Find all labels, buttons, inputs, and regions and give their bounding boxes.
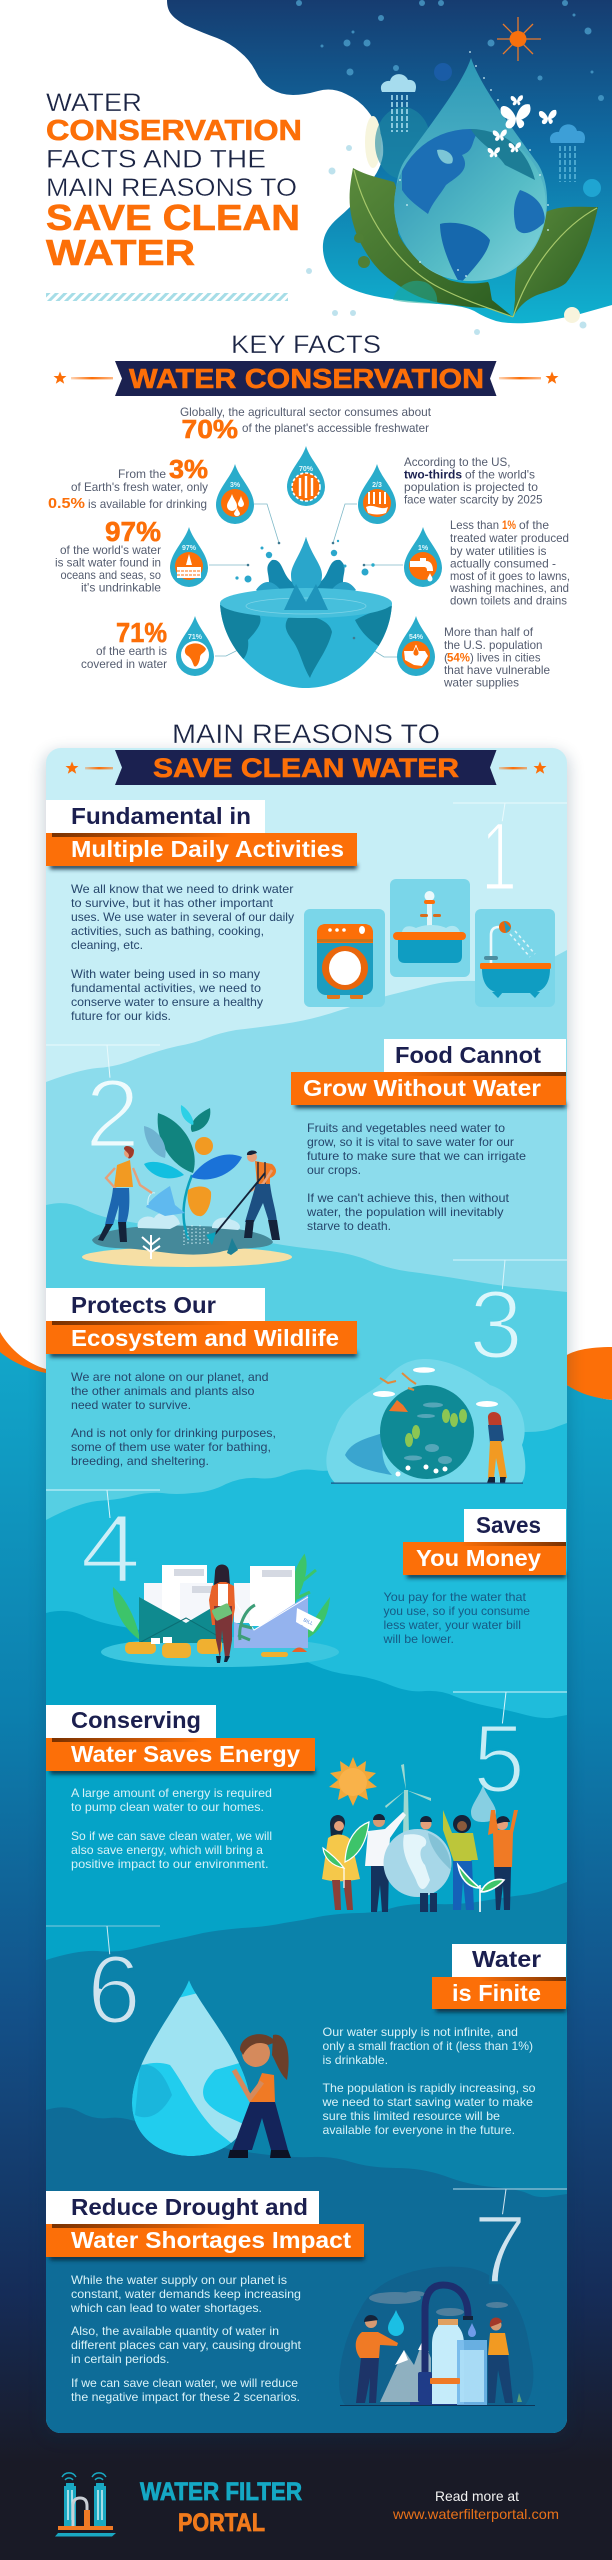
title: SAVE CLEAN <box>46 197 300 238</box>
reason 4 body: will be lower. <box>382 1632 454 1646</box>
bushes <box>138 1212 240 1230</box>
reason 6 body: we need to start saving water to make <box>321 2095 533 2109</box>
reason 1 body: uses. We use water in several of our daily <box>71 910 294 924</box>
title: FACTS AND THE <box>46 146 266 174</box>
reason 7 body: different places can vary, causing drought <box>71 2338 302 2352</box>
key fact: 1 percent consumed: washing machines, and <box>449 581 569 595</box>
icon: left rain cloud <box>381 74 416 132</box>
title: WATER <box>46 89 142 117</box>
reason 2 body: water, the population will inevitably <box>306 1205 504 1219</box>
banner: water conservation <box>54 361 558 396</box>
key fact: 54 percent cities: that have vulnerable <box>444 663 550 677</box>
number 4: 4 <box>80 1494 141 1603</box>
footer read more: www.waterfilterportal.com <box>392 2506 559 2522</box>
reason 2 body: grow, so it is vital to save water for our <box>307 1135 514 1149</box>
left leaf <box>350 168 513 317</box>
decorative blob behind ecosystem illustration <box>326 1359 525 1483</box>
key fact: 70 percent agriculture: 70% <box>182 414 238 444</box>
icon: right rain cloud <box>550 124 585 182</box>
man <box>206 1151 280 1245</box>
wind turbine <box>385 1764 431 1835</box>
connector lines <box>209 504 403 657</box>
reason 1 body: We all know that we need to drink water <box>71 882 294 896</box>
globe bowl with water splash <box>220 537 395 688</box>
water drop icon: 54 percent USA: 54% <box>409 634 424 641</box>
small white plants <box>142 1235 160 1259</box>
heading: key facts: KEY FACTS <box>231 331 381 359</box>
illustration: girl hugging water drop <box>130 1980 291 2158</box>
water drop icon: 1 percent tap: 1% <box>418 545 429 552</box>
hero blue wave blob <box>167 0 612 323</box>
reason 5 body: also save energy, which will bring a <box>71 1843 263 1857</box>
water drop icon: 1 percent tap <box>404 527 442 587</box>
reason 6 body <box>321 2025 536 2137</box>
title <box>46 89 302 273</box>
key fact: two-thirds scarcity: population is projected to <box>404 480 538 494</box>
key fact: 3 percent fresh water: From the <box>118 467 166 481</box>
number 5: 5 <box>473 1704 525 1813</box>
footer wordmark <box>140 2478 302 2537</box>
reason 6 heading <box>432 1944 566 2012</box>
plant <box>458 1865 504 1912</box>
reason 1 body: to survive, but it has other important <box>71 896 274 910</box>
decorative blob behind tap illustration <box>339 2267 533 2405</box>
water drop icon: 54 percent USA <box>397 616 435 676</box>
reason 3 body: the other animals and plants also <box>71 1384 255 1398</box>
panel: reasons card with wave bands <box>46 748 567 2433</box>
banner: save clean water <box>66 750 546 785</box>
water drop icon: two thirds <box>358 464 396 524</box>
reason 1 body: activities, such as bathing, cooking, <box>71 924 264 938</box>
reason 5 heading: Water Saves Energy <box>71 1741 300 1767</box>
reason 1 body <box>71 882 294 1023</box>
island <box>82 1247 292 1267</box>
reason 1 heading: Multiple Daily Activities <box>71 836 344 862</box>
reason 1 body: future for our kids. <box>71 1009 171 1023</box>
key fact: 97 percent salt water: of the world's water <box>60 543 161 557</box>
reason 3 body: breeding, and sheltering. <box>71 1454 209 1468</box>
reason 3 heading <box>46 1288 357 1357</box>
reason 1 heading: Fundamental in <box>71 803 251 829</box>
illustration: ecosystem globe <box>331 1367 523 1484</box>
reason 1 body: conserve water to ensure a healthy <box>71 995 263 1009</box>
card shadow <box>44 752 569 2438</box>
key fact: 3 percent fresh water: is available for drinking <box>88 497 207 511</box>
key fact: 54 percent cities: ) lives in cities <box>470 650 540 664</box>
reason 6 body: available for everyone in the future. <box>322 2123 515 2137</box>
water drop icon: two thirds: 2/3 <box>372 482 382 489</box>
key fact: 70 percent agriculture <box>180 405 432 444</box>
illustration: tap, bottle and people <box>340 2285 535 2406</box>
key fact: 1 percent consumed: by water utilities is <box>450 544 546 558</box>
globe <box>384 1829 452 1897</box>
water drop icon: 3 percent: 3% <box>230 482 241 489</box>
reason 7 body: the negative impact for these 2 scenarios. <box>71 2390 300 2404</box>
key fact: 97 percent salt water <box>55 516 161 594</box>
bowl <box>220 603 392 688</box>
water drop icon: 70 percent <box>287 446 325 506</box>
right orange swoosh <box>560 1347 612 1400</box>
number 4 <box>46 1490 160 1603</box>
title: MAIN REASONS TO <box>46 174 297 202</box>
key fact: 1 percent consumed: actually consumed - <box>450 556 556 570</box>
reason 6 body: only a small fraction of it (less than 1%) <box>322 2039 533 2053</box>
key fact: 54 percent cities: the U.S. population <box>444 638 542 652</box>
key fact: two-thirds scarcity: face water scarcity by 2025 <box>404 492 543 506</box>
water drop icon: 70 percent: 70% <box>299 466 314 473</box>
reason 2 heading <box>291 1039 566 1108</box>
water drop and man in orange <box>471 1785 518 1910</box>
banner: water conservation: WATER CONSERVATION <box>129 363 484 394</box>
man behind globe <box>420 1816 432 1830</box>
key fact: two-thirds scarcity: According to the US, <box>404 455 510 469</box>
number 3: 3 <box>469 1270 523 1379</box>
teal disc at leaf base <box>393 281 437 304</box>
key fact: 54 percent cities: water supplies <box>443 676 519 690</box>
key fact: 54 percent cities: 54% <box>447 650 470 664</box>
reason 4 heading: Saves <box>476 1512 541 1538</box>
reason 5 body: So if we can save clean water, we will <box>71 1829 272 1843</box>
number 1: 1 <box>481 802 517 911</box>
reason 6 heading: is Finite <box>452 1980 541 2006</box>
reason 6 body: Our water supply is not infinite, and <box>322 2025 518 2039</box>
title: WATER <box>46 232 195 273</box>
man in white <box>365 1812 406 1912</box>
key fact: 1 percent consumed: Less than <box>450 518 499 532</box>
reason 7 body: which can lead to water shortages. <box>70 2301 262 2315</box>
reason 5 body: A large amount of energy is required <box>71 1786 272 1800</box>
reason 2 body: If we can't achieve this, then without <box>307 1191 510 1205</box>
woman <box>98 1146 152 1242</box>
key fact: 1 percent consumed: of the <box>519 518 549 532</box>
reason 7 body: Also, the available quantity of water in <box>71 2324 279 2338</box>
key fact: 1 percent consumed: most of it goes to lawns, <box>450 569 570 583</box>
reason 7 heading <box>46 2191 364 2260</box>
water drop icon: 3 percent <box>216 464 254 524</box>
key fact: two-thirds scarcity: of the world's <box>465 468 535 482</box>
reason 3 heading: Ecosystem and Wildlife <box>71 1325 339 1351</box>
reason 7 body: While the water supply on our planet is <box>71 2273 287 2287</box>
key fact: 1 percent consumed <box>449 518 570 608</box>
girl <box>272 2035 289 2080</box>
footer wordmark: WATER FILTER <box>140 2478 302 2506</box>
reason 3 body <box>71 1370 276 1468</box>
reason 2 heading: Food Cannot <box>395 1042 541 1068</box>
icon: sun <box>497 17 541 61</box>
key fact: 54 percent cities: ( <box>444 650 448 664</box>
footer read more <box>392 2488 559 2522</box>
reason 7 body: constant, water demands keep increasing <box>71 2287 301 2301</box>
key fact: 97 percent salt water: it's undrinkable <box>81 580 161 594</box>
key fact: two-thirds scarcity: two-thirds <box>404 468 462 482</box>
key fact: 97 percent salt water: oceans and seas, so <box>60 568 161 582</box>
key fact: 3 percent fresh water: 0.5% <box>48 495 85 512</box>
reason 7 body: in certain periods. <box>71 2352 170 2366</box>
illustration: bathtub with shower <box>475 909 555 1007</box>
title underline hatch <box>46 293 288 301</box>
water drop icon: 71 percent globe: 71% <box>188 634 203 641</box>
number 2: 2 <box>85 1059 140 1168</box>
key fact: 3 percent fresh water: of Earth's fresh water, only <box>71 480 208 494</box>
title: CONSERVATION <box>46 115 302 147</box>
key fact: 1 percent consumed: down toilets and drains <box>450 594 567 608</box>
reason 5 body <box>71 1786 272 1871</box>
reason 7 heading: Water Shortages Impact <box>71 2227 351 2253</box>
reason 2 heading: Grow Without Water <box>303 1075 541 1101</box>
illustration: bills and coins <box>101 1557 339 1667</box>
reason 2 body <box>306 1121 526 1233</box>
key fact: 1 percent consumed: 1% <box>502 518 516 532</box>
footer read more: Read more at <box>435 2488 519 2504</box>
number 3 <box>453 1260 567 1379</box>
reason 6 body: is drinkable. <box>322 2053 388 2067</box>
reason 3 body: And is not only for drinking purposes, <box>71 1426 276 1440</box>
reason 2 body: Fruits and vegetables need water to <box>307 1121 505 1135</box>
reason 6 body: sure this limited resource will be <box>322 2109 500 2123</box>
key fact: 71 percent covered: of the earth is <box>96 644 167 658</box>
watering can <box>146 1186 185 1216</box>
reason 7 body <box>70 2273 302 2404</box>
reason 5 heading: Conserving <box>71 1707 201 1733</box>
illustration: washing machine <box>304 909 385 1007</box>
key fact: two-thirds scarcity <box>404 455 543 506</box>
number 6: 6 <box>87 1935 141 2044</box>
reason 2 body: future to make sure that we can irrigate <box>307 1149 526 1163</box>
woman in yellow <box>322 1815 360 1910</box>
key fact: 1 percent consumed: treated water produced <box>450 531 569 545</box>
butterflies <box>488 95 557 157</box>
key fact: 3 percent fresh water: 3% <box>169 454 208 484</box>
leaf branch <box>323 1822 369 1888</box>
water drop icon: 97 percent: 97% <box>182 545 197 552</box>
key fact: 3 percent fresh water <box>48 454 208 512</box>
pale discs behind drop <box>365 116 381 168</box>
reason 6 body: The population is rapidly increasing, so <box>322 2081 536 2095</box>
number 7: 7 <box>473 2195 527 2304</box>
reason 3 body: some of them use water for bathing, <box>71 1440 271 1454</box>
splash <box>235 537 368 612</box>
number 1 <box>453 802 567 911</box>
reason 4 body: less water, your water bill <box>384 1618 521 1632</box>
reason 3 body: We are not alone on our planet, and <box>71 1370 268 1384</box>
illustration: people watering plant <box>82 1105 292 1267</box>
footer logo icon <box>55 2473 116 2536</box>
key fact: 97 percent salt water: is salt water found in <box>55 556 161 570</box>
globe <box>394 127 546 284</box>
reason 1 heading <box>46 800 357 869</box>
banner: save clean water: SAVE CLEAN WATER <box>153 753 459 783</box>
left orange swoosh <box>0 1332 46 1373</box>
reason 5 heading <box>46 1705 315 1774</box>
reason 3 heading: Protects Our <box>71 1292 216 1318</box>
number 5 <box>453 1692 567 1813</box>
reason 4 heading: You Money <box>416 1545 541 1571</box>
reason 1 body: With water being used in so many <box>71 967 260 981</box>
illustration: people with globe and wind turbine <box>322 1757 518 1912</box>
right leaf <box>513 207 598 317</box>
side background gradient <box>0 1350 612 2560</box>
reason 1 body: fundamental activities, we need to <box>71 981 261 995</box>
key fact: 71 percent covered <box>81 617 167 671</box>
reason 5 body: positive impact to our environment. <box>71 1857 268 1871</box>
number 7 <box>453 2189 567 2304</box>
number 2 <box>46 1045 160 1168</box>
key fact: 71 percent covered: 71% <box>116 617 167 648</box>
key fact: 71 percent covered: covered in water <box>81 657 167 671</box>
key fact: 97 percent salt water: 97% <box>105 516 161 547</box>
water drop icon: 97 percent <box>170 527 208 587</box>
sparkle dots <box>399 51 549 277</box>
background bubbles <box>296 0 604 335</box>
reason 4 heading <box>403 1509 566 1578</box>
heading: main reasons: MAIN REASONS TO <box>172 719 440 749</box>
reason 6 heading: Water <box>472 1946 541 1972</box>
water drop icon: 71 percent globe <box>176 616 214 676</box>
water drop <box>396 58 547 281</box>
plant <box>184 1175 192 1240</box>
illustration: bills and coins: BILL <box>302 1617 314 1627</box>
woman in green <box>443 1810 478 1910</box>
reason 7 body: If we can save clean water, we will reduce <box>71 2376 298 2390</box>
reason 3 body: need water to survive. <box>71 1398 191 1412</box>
reason 4 body <box>382 1590 530 1646</box>
key fact: 70 percent agriculture: Globally, the agricultural sector consumes about <box>180 405 432 419</box>
key fact: 70 percent agriculture: of the planet's accessible freshwater <box>242 421 429 435</box>
reason 1 body: cleaning, etc. <box>71 938 143 952</box>
footer wordmark: PORTAL <box>178 2509 265 2537</box>
reason 4 body: You pay for the water that <box>384 1590 527 1604</box>
key fact: 54 percent cities <box>443 625 550 690</box>
hero illustration: water drop globe, leaves, sun and clouds <box>296 0 604 335</box>
sun <box>329 1757 377 1806</box>
illustration: sink <box>390 879 470 977</box>
connector dots <box>247 542 375 639</box>
reason 4 body: you use, so if you consume <box>384 1604 530 1618</box>
reason 2 body: starve to death. <box>307 1219 391 1233</box>
number 6 <box>46 1926 160 2044</box>
reason 7 heading: Reduce Drought and <box>71 2194 308 2220</box>
reason 5 body: to pump clean water to our homes. <box>71 1800 264 1814</box>
key fact: 54 percent cities: More than half of <box>444 625 534 639</box>
reason 2 body: our crops. <box>307 1163 361 1177</box>
